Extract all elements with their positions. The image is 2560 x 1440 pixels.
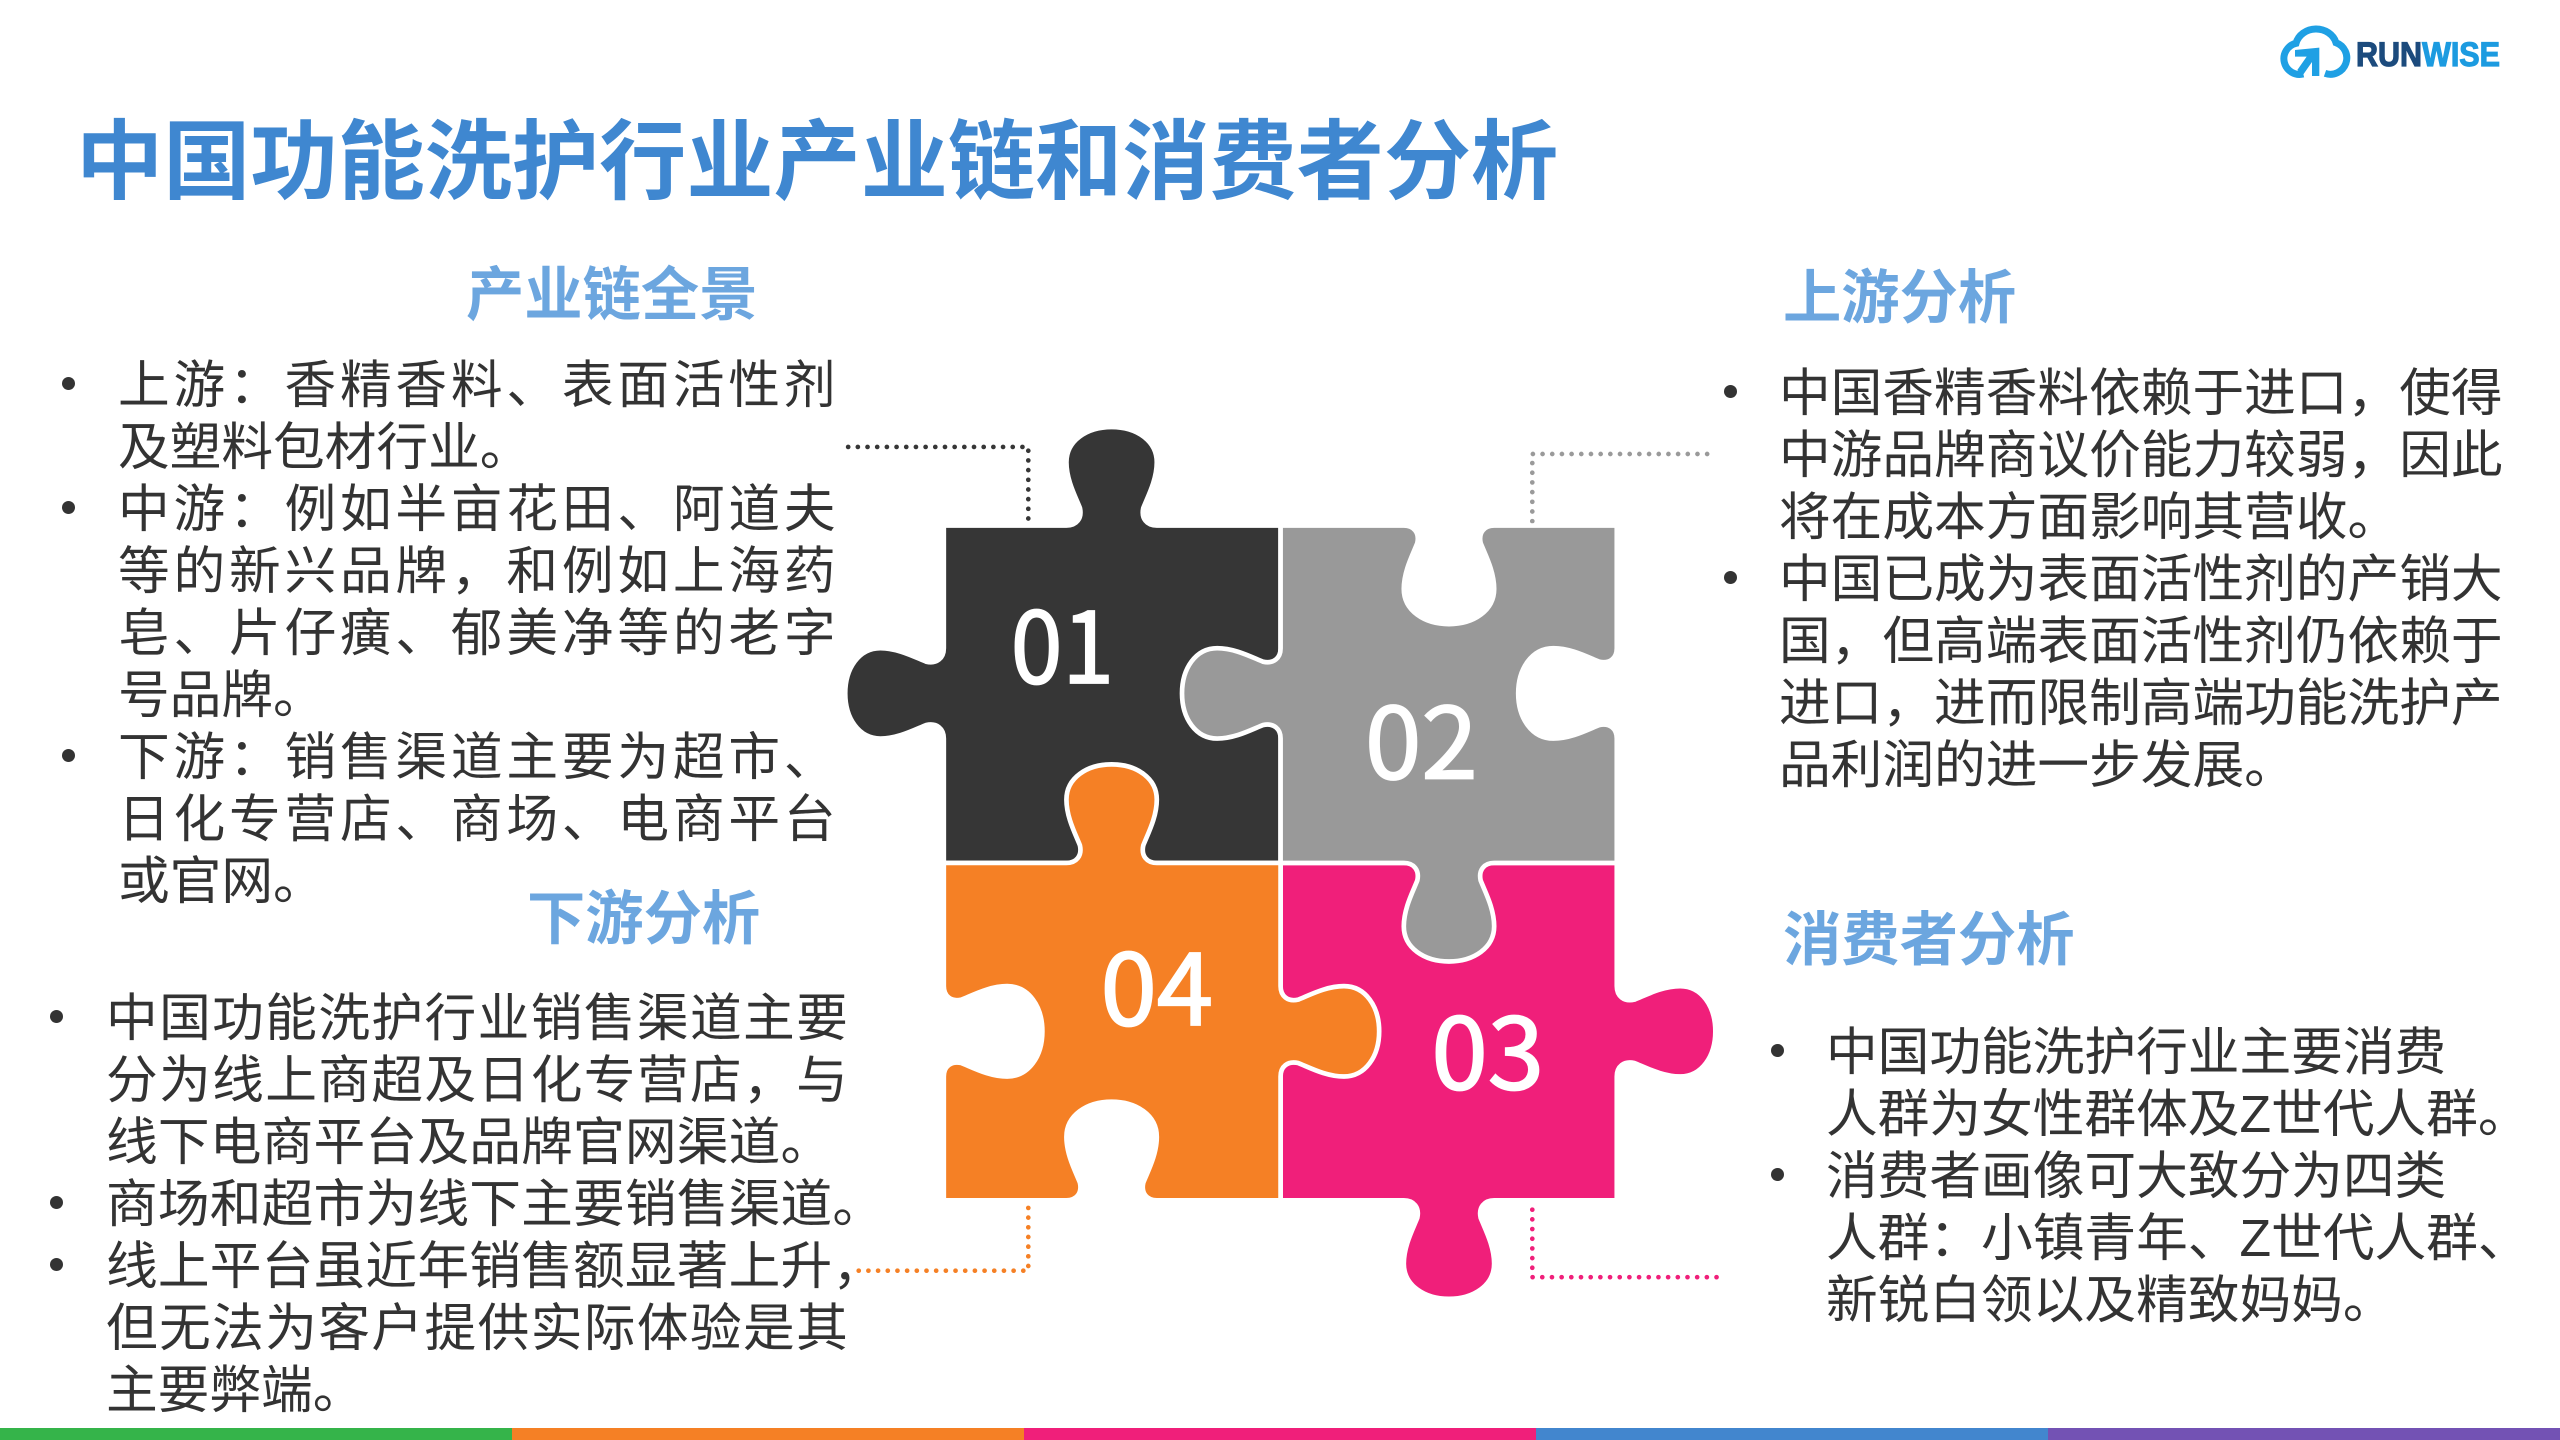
bullet: online platforms: 主要弊端。 <box>106 1361 364 1419</box>
bullet: sales channels: 中国功能洗护行业销售渠道主要 <box>106 989 849 1047</box>
connector: piece 02 <box>1532 454 1707 526</box>
logo: Runwise: RUNWISE <box>2356 36 2500 74</box>
puzzle piece 04 <box>944 764 1379 1200</box>
bullet: fragrance imports <box>1724 364 2503 546</box>
bottom colour bar <box>0 1428 2560 1440</box>
bullet: upstream: 及塑料包材行业。 <box>118 418 532 476</box>
connector: piece 01 <box>848 447 1028 524</box>
bullet: consumer portraits: 人群：小镇青年、Z世代人群、 <box>1826 1209 2530 1267</box>
text block: consumer analysis <box>1771 1023 2530 1329</box>
bullet: main consumers <box>1771 1023 2530 1143</box>
connector: piece 03 <box>1532 1199 1717 1277</box>
heading: upstream analysis: 上游分析 <box>1783 250 2016 335</box>
puzzle piece 04: 04 <box>1100 912 1213 1054</box>
bullet: surfactants: 国，但高端表面活性剂仍依赖于 <box>1779 612 2503 670</box>
heading: value chain overview: 产业链全景 <box>466 247 758 332</box>
connector: piece 04 <box>859 1200 1028 1271</box>
bullet: consumer portraits: 新锐白领以及精致妈妈。 <box>1826 1271 2395 1329</box>
bullet: main consumers: 人群为女性群体及Z世代人群。 <box>1826 1085 2530 1143</box>
bullet: upstream: 上游：香精香料、表面活性剂 <box>118 356 839 414</box>
title: 中国功能洗护行业产业链和消费者分析 <box>76 92 1558 218</box>
bullet: sales channels: 分为线上商超及日化专营店，与 <box>106 1051 849 1109</box>
bullet: consumer portraits: 消费者画像可大致分为四类 <box>1826 1147 2446 1205</box>
bullet: midstream: 中游：例如半亩花田、阿道夫 <box>118 480 839 538</box>
bullet: midstream: 皂、片仔癀、郁美净等的老字 <box>118 604 839 662</box>
bullet: surfactants: 中国已成为表面活性剂的产销大 <box>1779 550 2503 608</box>
bullet: online platforms: 但无法为客户提供实际体验是其 <box>106 1299 849 1357</box>
bullet: online platforms: 线上平台虽近年销售额显著上升， <box>106 1237 884 1295</box>
puzzle piece 01 <box>845 427 1281 863</box>
text block: downstream analysis <box>50 989 884 1419</box>
bullet: sales channels: 线下电商平台及品牌官网渠道。 <box>106 1113 832 1171</box>
bullet: upstream <box>62 356 839 476</box>
bullet: fragrance imports: 中游品牌商议价能力较弱，因此 <box>1779 426 2503 484</box>
puzzle piece 03: 03 <box>1431 976 1544 1118</box>
puzzle piece 01: 01 <box>1011 570 1114 712</box>
puzzle graphic <box>846 429 1719 1296</box>
text block: upstream analysis <box>1724 364 2503 794</box>
puzzle piece 02 <box>1182 526 1617 962</box>
bullet: sales channels <box>50 989 849 1171</box>
puzzle piece 02: 02 <box>1365 665 1478 807</box>
bullet: midstream: 等的新兴品牌，和例如上海药 <box>118 542 839 600</box>
text block: value chain overview <box>62 356 839 910</box>
bullet: surfactants: 品利润的进一步发展。 <box>1779 736 2296 794</box>
bullet: downstream <box>62 728 839 910</box>
bullet: main consumers: 中国功能洗护行业主要消费 <box>1826 1023 2446 1081</box>
bullet: offline channels: 商场和超市为线下主要销售渠道。 <box>106 1175 884 1233</box>
heading: downstream analysis: 下游分析 <box>527 871 760 956</box>
bullet: downstream: 或官网。 <box>118 852 325 910</box>
bullet: fragrance imports: 中国香精香料依赖于进口，使得 <box>1779 364 2503 422</box>
logo: Runwise <box>2280 26 2500 78</box>
heading: consumer analysis: 消费者分析 <box>1783 892 2074 977</box>
bullet: consumer portraits <box>1771 1147 2530 1329</box>
bullet: surfactants: 进口，进而限制高端功能洗护产 <box>1779 674 2503 732</box>
bullet: downstream: 下游：销售渠道主要为超市、 <box>118 728 839 786</box>
bullet: downstream: 日化专营店、商场、电商平台 <box>118 790 839 848</box>
puzzle piece 03 <box>1281 863 1715 1299</box>
bullet: midstream <box>62 480 839 724</box>
bullet: fragrance imports: 将在成本方面影响其营收。 <box>1779 488 2399 546</box>
bullet: surfactants <box>1724 550 2503 794</box>
bullet: online platforms <box>50 1237 884 1419</box>
bullet: midstream: 号品牌。 <box>118 666 325 724</box>
